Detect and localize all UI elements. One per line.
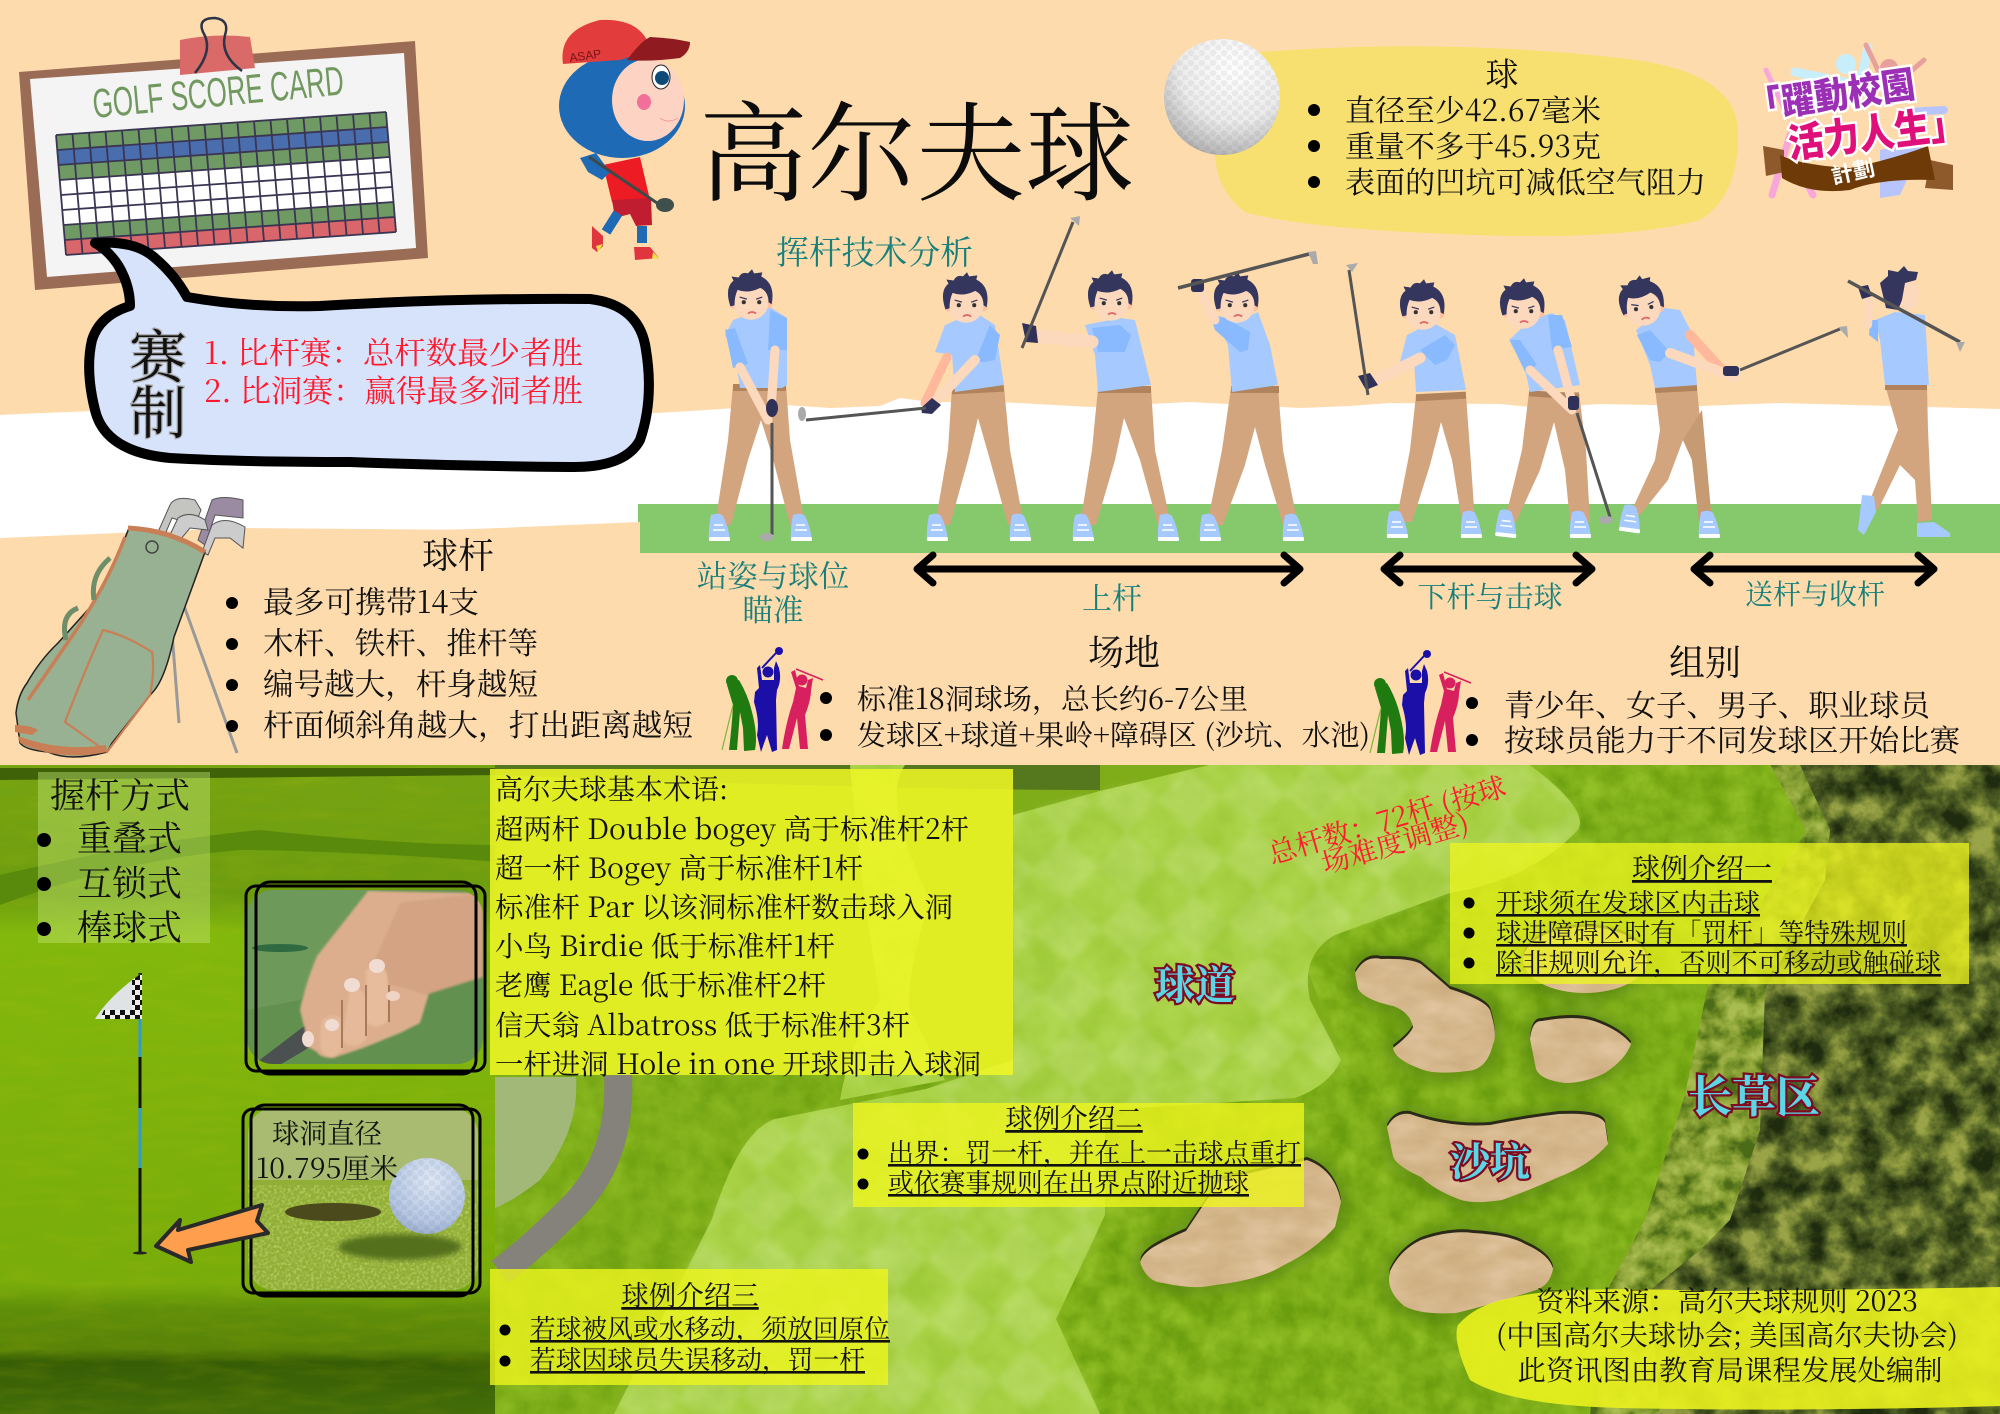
label: stance and aim: 瞄准 xyxy=(742,586,804,630)
hole photo frame xyxy=(243,1105,480,1296)
panel: ball facts xyxy=(1215,46,1738,236)
groups list: 按球员能力于不同发球区开始比赛 xyxy=(1504,716,1960,760)
icon: golfer silhouettes (groups) xyxy=(1370,650,1471,755)
clubs list: 最多可携带14支 xyxy=(263,578,479,622)
tall grass patch xyxy=(495,1077,576,1208)
terms text: 高尔夫球基本术语: xyxy=(495,768,728,808)
logo ribbon: 計劃 xyxy=(1829,155,1877,189)
terms text: 一杆进洞 Hole in one 开球即击入球洞 xyxy=(495,1043,981,1083)
figure 8: finish xyxy=(1848,266,1965,537)
ball fact list: 直径至少42.67毫米 xyxy=(1345,86,1601,130)
rule 1 list: 除非规则允许，否则不可移动或触碰球 xyxy=(1496,943,1941,980)
grip list: 互锁式 xyxy=(77,857,182,907)
heading: 球: 球 xyxy=(1486,49,1518,96)
logo slogan: 活力人生」 xyxy=(1786,102,1968,167)
terms text: 信天翁 Albatross 低于标准杆3杆 xyxy=(495,1004,910,1044)
label: downswing and impact: 下杆与击球 xyxy=(1417,575,1563,616)
panel: rule example 2 xyxy=(853,1096,1304,1207)
icon: golfer silhouettes (venue) xyxy=(722,647,823,752)
peach strip behind club section xyxy=(0,522,640,770)
note: total strokes: 场难度调整) xyxy=(1316,802,1473,883)
rule 2 heading: 球例介绍二 xyxy=(1005,1096,1143,1136)
hole diameter text xyxy=(256,1111,398,1186)
arrow: backswing span xyxy=(917,555,1300,583)
icon: golf bag xyxy=(15,498,245,757)
groups list: 青少年、女子、男子、职业球员 xyxy=(1504,681,1932,725)
rule 1 list: 球进障碍区时有「罚杆」等特殊规则 xyxy=(1496,913,1907,950)
photo: hole and ball xyxy=(243,1105,480,1296)
speech bubble: competition format xyxy=(89,243,649,467)
logo slogan xyxy=(1745,63,1968,167)
logo jumping figures xyxy=(1766,45,1944,198)
heading: 赛制 xyxy=(130,312,186,450)
icon: flag xyxy=(95,973,147,1254)
clubs list: 木杆、铁杆、推杆等 xyxy=(263,619,538,663)
heading: 球杆: 球杆 xyxy=(422,528,494,579)
panel: rule example 3 xyxy=(490,1269,890,1385)
figure 2: backswing start xyxy=(798,272,1031,541)
hole diameter text: 球洞直径 xyxy=(272,1111,382,1151)
grip list xyxy=(37,812,182,951)
rule 3 heading: 球例介绍三 xyxy=(621,1273,759,1313)
score card clip xyxy=(180,18,255,75)
format list xyxy=(204,328,583,411)
cart path xyxy=(500,1075,618,1272)
logo: 躍動校園 活力人生 xyxy=(1745,45,1968,198)
label: rough: 长草区 xyxy=(1688,1061,1820,1125)
venue list: 发球区+球道+果岭+障碍区 (沙坑、水池) xyxy=(857,713,1370,754)
format list: 2. 比洞赛：赢得最多洞者胜 xyxy=(204,366,583,411)
figure 7: follow through xyxy=(1616,273,1848,538)
terms text: 小鸟 Birdie 低于标准杆1杆 xyxy=(495,925,835,965)
title: 高尔夫球 xyxy=(699,68,1134,223)
figure 3: backswing mid xyxy=(1022,216,1179,541)
label: fairway: 球道 xyxy=(1155,954,1235,1011)
label: stance and aim: 站姿与球位 xyxy=(697,552,849,596)
heading: 握杆方式: 握杆方式 xyxy=(50,769,190,819)
terms text: 超一杆 Bogey 高于标准杆1杆 xyxy=(495,847,863,887)
terms text: 老鹰 Eagle 低于标准杆2杆 xyxy=(495,964,826,1004)
grip list: 重叠式 xyxy=(77,812,182,862)
score card grid xyxy=(56,112,396,255)
terms text: 标准杆 Par 以该洞标准杆数击球入洞 xyxy=(495,886,953,926)
ball fact list xyxy=(1308,86,1706,202)
background: white torn band xyxy=(0,398,2000,538)
format list: 1. 比杆赛：总杆数最少者胜 xyxy=(204,328,583,373)
photo: golf course background xyxy=(0,760,2000,1414)
photo: grip hand xyxy=(246,882,485,1074)
grip list: 棒球式 xyxy=(77,901,182,951)
ball fact list: 重量不多于45.93克 xyxy=(1345,122,1601,166)
panel: rule example 1 xyxy=(1450,843,1969,984)
hole diameter text: 10.795厘米 xyxy=(256,1146,398,1186)
rule 2 list: 或依赛事规则在出界点附近抛球 xyxy=(888,1163,1249,1200)
mascot golfer xyxy=(559,20,690,260)
venue list xyxy=(820,677,1370,754)
bunkers xyxy=(1140,924,1647,1313)
score card title: GOLF SCORE CARD xyxy=(91,57,346,127)
rule 2 list xyxy=(858,1133,1301,1200)
green ground strip xyxy=(638,504,2000,553)
figure 1: stance xyxy=(709,269,812,541)
background: peach paper xyxy=(0,0,2000,770)
panel: grip styles xyxy=(37,769,210,951)
figure 5: downswing xyxy=(1346,263,1482,538)
source text: 资料来源：高尔夫球规则 2023 xyxy=(1536,1280,1918,1320)
panel: sources xyxy=(1456,1280,2000,1410)
arrow: downswing span xyxy=(1384,555,1592,583)
heading: 组别: 组别 xyxy=(1669,635,1741,686)
label: stance and aim xyxy=(697,552,849,630)
heading: 场地: 场地 xyxy=(1088,625,1160,676)
clubs list: 杆面倾斜角越大，打出距离越短 xyxy=(263,701,693,745)
panel: venue xyxy=(820,625,1370,754)
figure 4: top of backswing xyxy=(1178,251,1318,541)
grip photo frame xyxy=(246,882,485,1074)
figure 6: impact xyxy=(1495,278,1613,538)
panel: groups xyxy=(1466,635,1960,760)
rule 1 list xyxy=(1464,883,1941,980)
score card xyxy=(19,18,428,290)
venue list: 标准18洞球场，总长约6-7公里 xyxy=(857,677,1248,718)
source text: 此资讯图由教育局课程发展处编制 xyxy=(1518,1349,1942,1389)
arrow: from hole to flag xyxy=(156,1205,268,1262)
icon: golf ball xyxy=(1164,39,1280,155)
source text: (中国高尔夫球协会; 美国高尔夫协会) xyxy=(1496,1314,1958,1354)
panel: clubs xyxy=(226,528,693,745)
mascot golfer: ASAP xyxy=(568,47,602,65)
label: bunker: 沙坑 xyxy=(1450,1131,1530,1188)
logo slogan: 「躍動校園 xyxy=(1745,63,1917,128)
rule 1 list: 开球须在发球区内击球 xyxy=(1496,883,1760,920)
rule 3 list: 若球因球员失误移动，罚一杆 xyxy=(530,1340,865,1377)
heading: swing analysis: 挥杆技术分析 xyxy=(776,227,973,274)
logo ribbon xyxy=(1763,146,1953,191)
heading: 赛制: 赛 xyxy=(130,312,186,394)
terms text xyxy=(495,768,981,1083)
rule 3 list xyxy=(500,1309,890,1377)
arrow: follow through span xyxy=(1694,555,1934,583)
heading: 赛制: 制 xyxy=(130,368,186,450)
ball fact list: 表面的凹坑可减低空气阻力 xyxy=(1345,158,1706,202)
groups list xyxy=(1466,681,1960,760)
semi-rough collar xyxy=(1056,764,1806,1414)
rule 3 list: 若球被风或水移动，须放回原位 xyxy=(530,1309,890,1346)
rule 1 heading: 球例介绍一 xyxy=(1632,847,1772,887)
fairway xyxy=(614,765,1580,1414)
forest and rough xyxy=(1560,765,2000,1414)
source text xyxy=(1496,1280,1958,1389)
label: follow through: 送杆与收杆 xyxy=(1745,573,1885,613)
clubs list: 编号越大，杆身越短 xyxy=(263,660,538,704)
label: backswing: 上杆 xyxy=(1082,574,1142,618)
peach edge xyxy=(0,760,2000,765)
rule 2 list: 出界：罚一杆，并在上一击球点重打 xyxy=(888,1133,1301,1170)
clubs list xyxy=(226,578,693,745)
note: total strokes: 总杆数：72杆 (按球 xyxy=(1263,765,1510,873)
terms text: 超两杆 Double bogey 高于标准杆2杆 xyxy=(495,808,969,848)
panel: basic terms xyxy=(490,768,1013,1083)
